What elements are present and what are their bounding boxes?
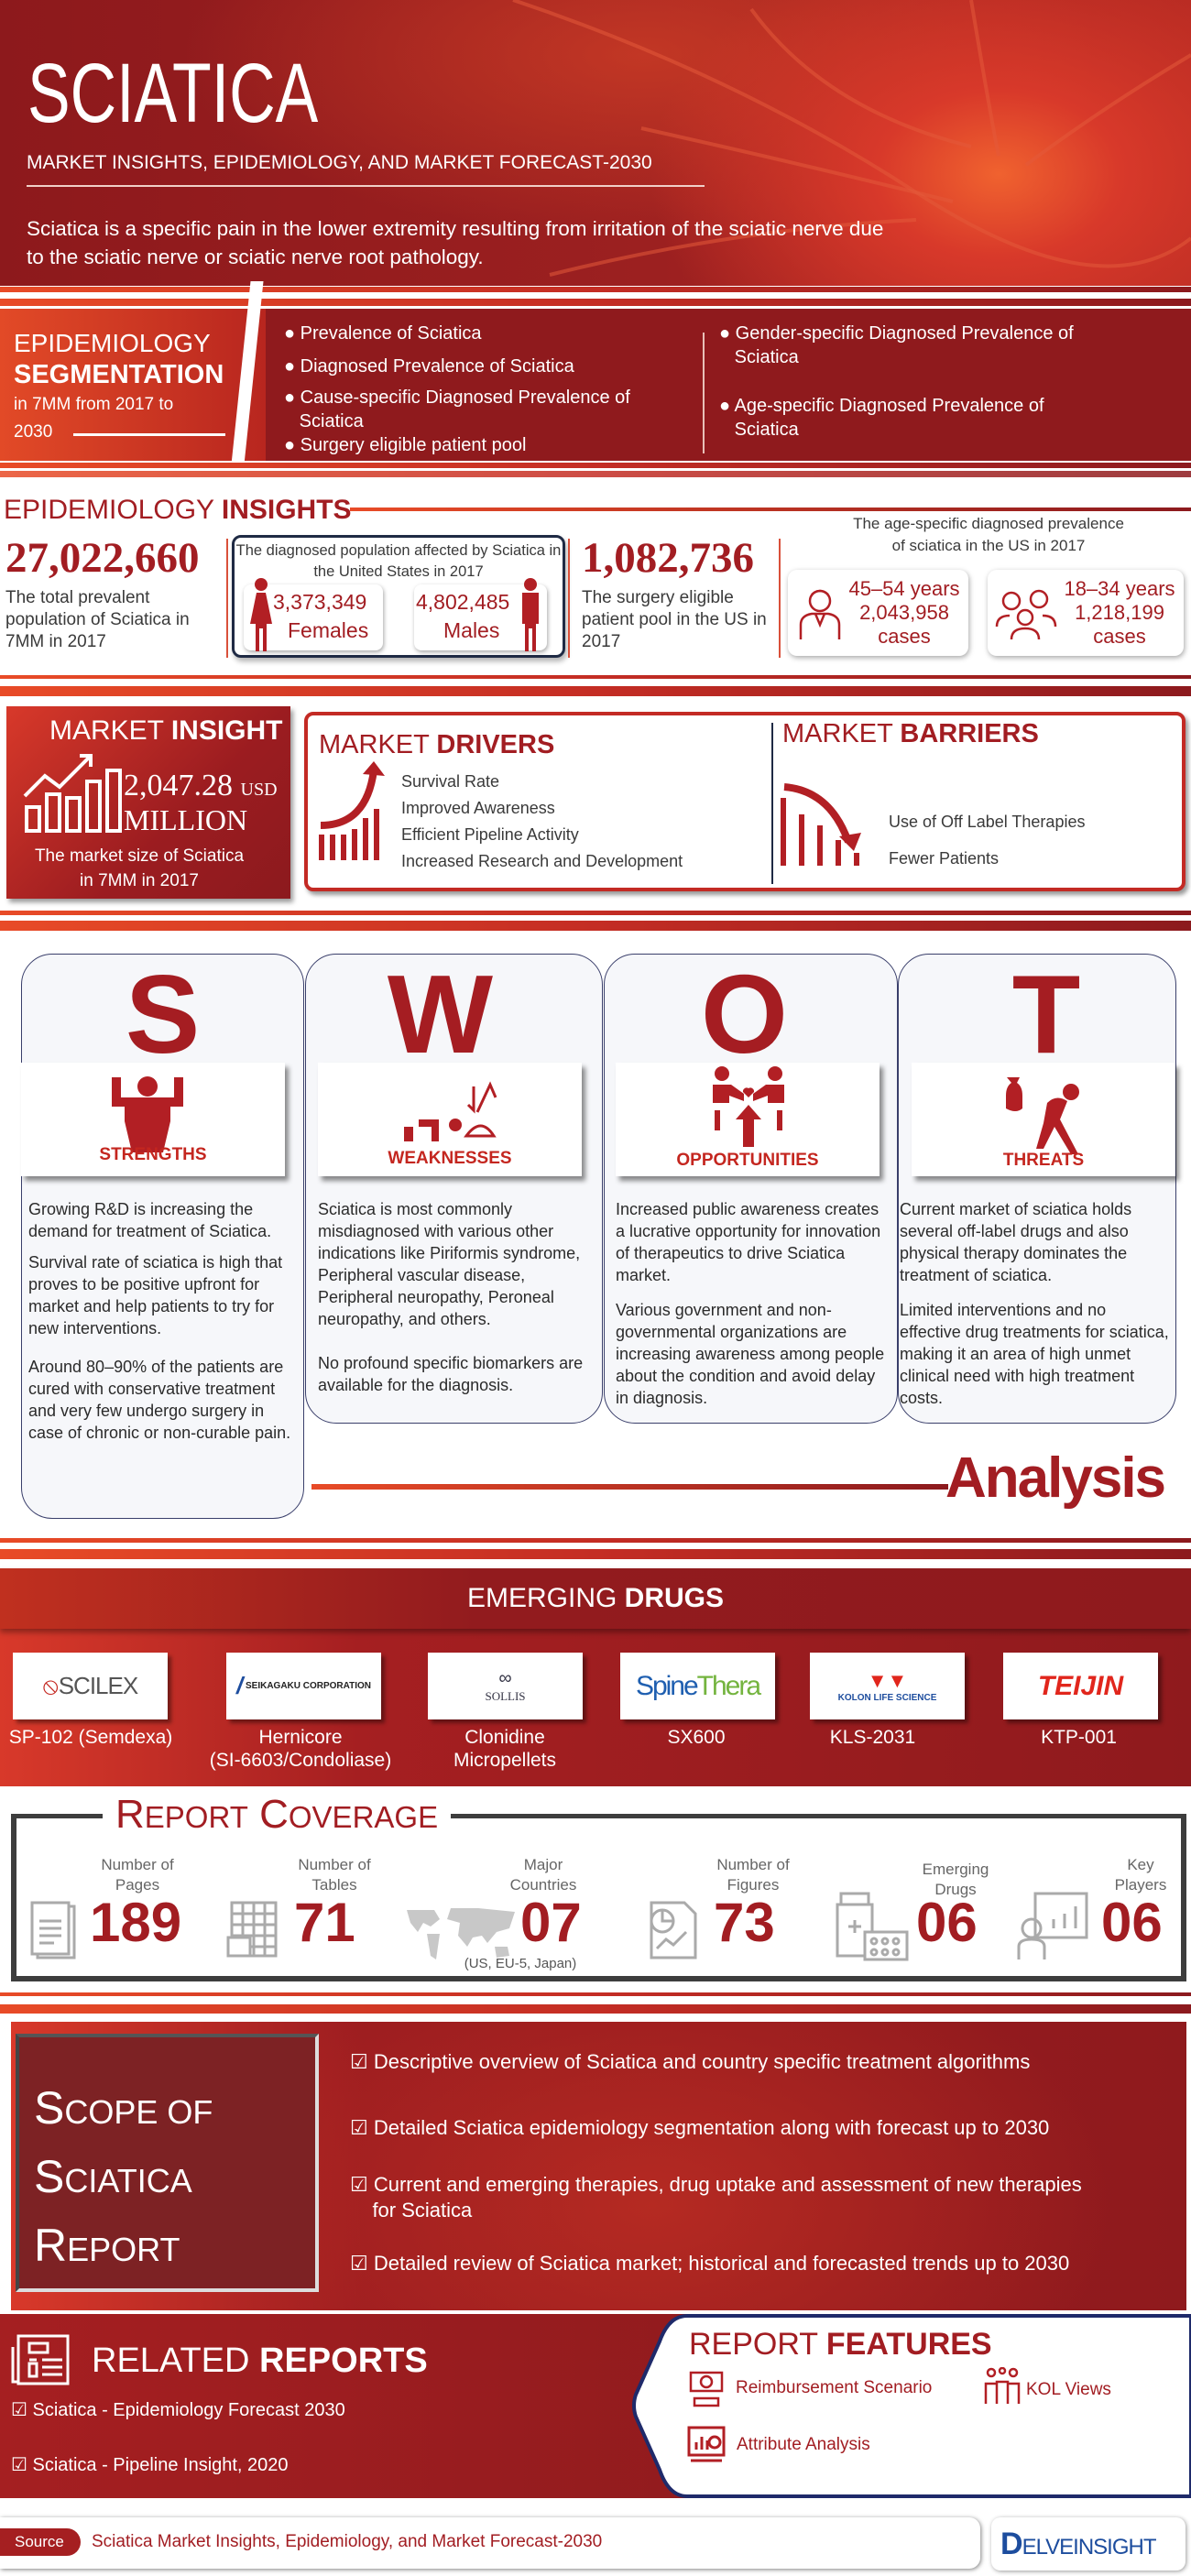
coverage: tables: Tables — [311, 1876, 357, 1894]
logo: kolon — [810, 1653, 965, 1719]
logo: kolon: ▼▼ — [868, 1669, 907, 1692]
text: threats: Limited interventions and no effective drug treatments for sciatica, making it an area of high unmet clinical need with high treatment costs. — [900, 1301, 1169, 1407]
card: 18-34: cases — [1093, 625, 1146, 648]
panel: epidemiology segmentation: ● Diagnosed Prevalence of Sciatica — [284, 356, 574, 377]
scope items: for Sciatica — [372, 2199, 472, 2221]
stripes — [0, 675, 1191, 679]
panel: epidemiology segmentation: ● Surgery eligible patient pool — [284, 435, 526, 455]
panel: epidemiology segmentation: Sciatica — [735, 420, 799, 440]
panel: SWOT threats — [898, 954, 1176, 1424]
logo: spinethera: Thera — [697, 1671, 759, 1700]
coverage: countries: (US, EU-5, Japan) — [464, 1956, 576, 1971]
coverage: emerging drugs — [836, 1861, 989, 1960]
source bar: Source — [15, 2533, 64, 2550]
scope items: ☑ Current and emerging therapies, drug uptake and assessment of new therapies — [350, 2173, 1082, 2196]
panel: drivers and barriers: MARKET DRIVERS — [319, 730, 554, 759]
box: scope title: SCOPE OF — [34, 2082, 213, 2134]
letter T: T — [1012, 952, 1080, 1076]
scope items: ☑ Detailed Sciatica epidemiology segmentation along with forecast up to 2030 — [350, 2116, 1049, 2139]
card: 18-34 — [988, 570, 1184, 656]
panel: report features — [632, 2314, 1191, 2498]
icon: rising bars — [319, 761, 385, 860]
card: weaknesses — [318, 1063, 582, 1176]
stat: total prevalent: The total prevalent population of Sciatica in 7MM in 2017 — [5, 588, 190, 651]
coverage: figures: Number of — [716, 1856, 790, 1873]
panel: market insight: 2,047.28 USD — [124, 769, 278, 802]
panel: market insight — [6, 706, 290, 899]
text: Micropellets — [453, 1750, 556, 1771]
hero background — [0, 0, 1191, 286]
logo: sollis — [428, 1653, 583, 1719]
heading: analysis — [311, 1446, 1164, 1510]
coverage: key players: 06 — [1101, 1892, 1163, 1953]
text: Hernicore — [258, 1727, 343, 1748]
stat: surgery eligible — [582, 534, 767, 651]
coverage: pages: Pages — [115, 1876, 159, 1894]
logo: spinethera — [620, 1653, 775, 1719]
card: strengths — [21, 1063, 285, 1176]
icon: growth chart — [24, 754, 122, 833]
text: strengths: Survival rate of sciatica is high that proves to be positive upfront for market and help patients to try for new interventions. — [28, 1253, 282, 1337]
panel: drivers and barriers: Improved Awareness — [401, 799, 555, 817]
text: opportunities: Various government and non-governmental organizations are increasing awareness among people about the condition and avoid delay in diagnosis. — [616, 1301, 884, 1407]
card: threats: THREATS — [1003, 1151, 1084, 1170]
logo: seikagaku: / — [236, 1672, 243, 1699]
text: strengths: Around 80–90% of the patients are cured with conservative treatment and very few undergo surgery in case of chronic or non-curable pain. — [28, 1358, 290, 1442]
text: SX600 — [667, 1727, 726, 1748]
card: males: 4,802,485 — [416, 590, 509, 614]
source bar: Sciatica Market Insights, Epidemiology, and Market Forecast-2030 — [92, 2532, 602, 2551]
text: strengths — [28, 1200, 290, 1442]
coverage: pages: Number of — [101, 1856, 174, 1873]
logo: teijin: TEIJIN — [1038, 1671, 1123, 1700]
panel: epidemiology segmentation: ● Prevalence of Sciatica — [284, 323, 482, 344]
card: 45-54: 2,043,958 — [859, 601, 949, 624]
card: females: Females — [288, 618, 368, 642]
icon: document — [11, 2334, 70, 2385]
coverage: countries: Major — [524, 1856, 563, 1873]
logo: delveinsight: DELVEINSIGHT — [1000, 2527, 1156, 2561]
panel: scope of report — [11, 2022, 1186, 2310]
text: opportunities — [616, 1200, 884, 1407]
panel: related reports: ☑ Sciatica - Pipeline Insight, 2020 — [11, 2455, 289, 2475]
logo: teijin — [1003, 1653, 1158, 1719]
letter S: S — [126, 952, 200, 1076]
panel: epidemiology segmentation: ● Age-specific Diagnosed Prevalence of — [719, 396, 1044, 416]
logo: spinethera: Spine — [636, 1671, 697, 1700]
logo: scilex: ⦸ — [43, 1671, 59, 1698]
panel: SWOT opportunities — [604, 954, 898, 1424]
panel: gender diagnosed population: The diagnosed population affected by Sciatica in the United States in 2017 — [236, 542, 561, 580]
logo: delveinsight — [991, 2517, 1186, 2571]
source bar — [0, 2517, 980, 2569]
icon: attribute analysis — [687, 2426, 726, 2462]
card: opportunities — [616, 1063, 880, 1176]
coverage: countries: Countries — [510, 1876, 576, 1894]
text: threats — [900, 1200, 1169, 1407]
card: weaknesses: WEAKNESSES — [388, 1149, 512, 1168]
box: scope title: SCIATICA — [34, 2151, 192, 2202]
stat: total prevalent — [5, 534, 200, 651]
stripes — [0, 911, 1191, 915]
card: males: Males — [443, 618, 499, 642]
text: weaknesses: No profound specific biomarkers are available for the diagnosis. — [318, 1354, 583, 1394]
panel: age-specific: The age-specific diagnosed prevalence — [853, 515, 1124, 532]
coverage: key players — [1017, 1856, 1166, 1959]
coverage: tables: 71 — [294, 1892, 355, 1953]
panel: drivers and barriers — [304, 712, 1186, 891]
logo: seikagaku: SEIKAGAKU CORPORATION — [246, 1681, 371, 1691]
panel: SWOT weaknesses — [305, 954, 603, 1424]
box: scope title — [16, 2034, 319, 2292]
panel: epidemiology segmentation: 2030 — [14, 422, 52, 442]
panel: report coverage — [11, 1814, 1186, 1981]
coverage: countries: 07 — [520, 1892, 582, 1953]
panel: SWOT strengths — [21, 954, 304, 1519]
panel: related reports: RELATED REPORTS — [92, 2341, 428, 2380]
heading: EMERGING DRUGS — [467, 1583, 724, 1613]
scope items: ☑ Descriptive overview of Sciatica and country specific treatment algorithms — [350, 2050, 1030, 2073]
panel: epidemiology segmentation — [0, 309, 1191, 461]
panel: epidemiology segmentation: ● Cause-specific Diagnosed Prevalence of — [284, 387, 630, 408]
logo: sollis: SOLLIS — [485, 1689, 526, 1703]
stripes — [0, 1538, 1191, 1543]
panel: market insight: MARKET INSIGHT — [49, 715, 282, 746]
heading: analysis: Analysis — [945, 1446, 1164, 1510]
card: strengths: STRENGTHS — [99, 1145, 207, 1164]
logo: scilex: SCILEX — [59, 1672, 137, 1699]
icon: reimbursement — [689, 2371, 724, 2407]
logo: seikagaku — [226, 1653, 381, 1719]
card: 18-34: 18–34 years — [1064, 577, 1175, 600]
stripes — [0, 1992, 1191, 1996]
heading: epidemiology insights: EPIDEMIOLOGY INSIGHTS — [4, 495, 352, 525]
card: threats — [912, 1063, 1175, 1176]
panel: related reports — [0, 2314, 696, 2498]
panel: market insight: MILLION — [124, 803, 247, 836]
icon: falling bars — [781, 783, 861, 866]
panel: report features: REPORT FEATURES — [689, 2327, 992, 2362]
coverage: figures — [650, 1856, 790, 1959]
coverage: tables — [227, 1856, 371, 1957]
subtitle: MARKET INSIGHTS, EPIDEMIOLOGY, AND MARKET FORECAST-2030 — [27, 152, 652, 173]
panel: report features: Attribute Analysis — [737, 2435, 870, 2454]
coverage: figures: 73 — [714, 1892, 775, 1953]
letter W: W — [388, 952, 493, 1076]
panel: emerging drugs — [0, 1568, 1191, 1786]
coverage: emerging drugs: 06 — [916, 1892, 978, 1953]
panel: epidemiology segmentation: in 7MM from 2017 to — [14, 395, 173, 414]
panel: drivers and barriers: Efficient Pipeline Activity — [401, 825, 579, 844]
letter O: O — [701, 952, 788, 1076]
text: (SI-6603/Condoliase) — [210, 1750, 391, 1771]
coverage: pages: 189 — [90, 1892, 181, 1953]
heading: report coverage: REPORT COVERAGE — [115, 1792, 438, 1837]
card: 18-34: 1,218,199 — [1075, 601, 1164, 624]
card: 45-54 — [788, 570, 968, 656]
panel: drivers and barriers: Use of Off Label Therapies — [889, 813, 1085, 831]
stat: surgery eligible: 1,082,736 — [582, 534, 754, 582]
coverage: emerging drugs: Drugs — [934, 1881, 977, 1898]
box: scope title: REPORT — [34, 2220, 180, 2271]
panel: drivers and barriers: MARKET BARRIERS — [782, 719, 1039, 748]
card: females — [244, 584, 383, 650]
panel: epidemiology segmentation: SEGMENTATION — [14, 360, 224, 389]
text: Clonidine — [464, 1727, 545, 1748]
panel: related reports: ☑ Sciatica - Epidemiology Forecast 2030 — [11, 2400, 345, 2420]
scope items — [350, 2050, 1082, 2275]
logo: kolon: KOLON LIFE SCIENCE — [838, 1693, 936, 1703]
stripes — [0, 287, 1191, 292]
panel: epidemiology segmentation: EPIDEMIOLOGY — [14, 329, 211, 357]
subtitle — [27, 152, 705, 187]
coverage: tables: Number of — [298, 1856, 371, 1873]
text: weaknesses: Sciatica is most commonly misdiagnosed with various other indications like Piriformis syndrome, Peripheral vascular disease, Peripheral neuropathy, Peroneal neuropathy, and others. — [318, 1200, 580, 1328]
title: SCIATICA — [27, 47, 318, 140]
card: 45-54: cases — [878, 625, 931, 648]
coverage: key players: Key — [1127, 1856, 1154, 1873]
coverage: pages — [31, 1856, 181, 1959]
panel: market insight: in 7MM in 2017 — [80, 871, 199, 890]
logo: sollis: ∞ — [498, 1668, 512, 1688]
panel: epidemiology segmentation: Sciatica — [300, 411, 364, 431]
coverage: countries — [407, 1856, 582, 1971]
card: females: 3,373,349 — [273, 590, 366, 614]
logo: scilex — [13, 1653, 168, 1719]
text: opportunities: Increased public awareness creates a lucrative opportunity for innovation of therapeutics to drive Sciatica market. — [616, 1200, 880, 1284]
icon: KOL — [984, 2367, 1021, 2404]
drug names: SP-102 (Semdexa) — [9, 1727, 172, 1748]
panel: drivers and barriers: Fewer Patients — [889, 849, 999, 868]
description: Sciatica is a specific pain in the lower extremity resulting from irritation of the sciatic nerve due to the sciatic nerve or sciatic nerve root pathology. — [27, 217, 883, 268]
text: strengths: Growing R&D is increasing the demand for treatment of Sciatica. — [28, 1200, 271, 1240]
coverage: figures: Figures — [727, 1876, 779, 1894]
panel: report features: KOL Views — [1026, 2380, 1111, 2399]
coverage: emerging drugs: Emerging — [923, 1861, 989, 1878]
panel: report features: Reimbursement Scenario — [736, 2378, 932, 2397]
panel: gender diagnosed population — [232, 535, 565, 658]
panel: epidemiology segmentation: Sciatica — [735, 347, 799, 367]
text: weaknesses — [318, 1200, 583, 1394]
coverage: key players: Players — [1115, 1876, 1166, 1894]
scope items: ☑ Detailed review of Sciatica market; historical and forecasted trends up to 2030 — [350, 2252, 1069, 2275]
panel: drivers and barriers: Survival Rate — [401, 772, 499, 791]
panel: age-specific — [786, 515, 1187, 661]
panel: age-specific: of sciatica in the US in 2017 — [892, 537, 1085, 554]
card: opportunities: OPPORTUNITIES — [676, 1151, 819, 1170]
stat: surgery eligible: The surgery eligible patient pool in the US in 2017 — [582, 588, 767, 651]
card: males — [414, 584, 547, 650]
text: threats: Current market of sciatica holds several off-label drugs and also physical therapy dominates the treatment of sciatica. — [900, 1200, 1131, 1284]
panel: market insight: The market size of Sciatica — [35, 846, 244, 866]
stat: total prevalent: 27,022,660 — [5, 534, 200, 582]
panel: epidemiology segmentation: ● Gender-specific Diagnosed Prevalence of — [719, 323, 1074, 344]
panel: drivers and barriers: Increased Research and Development — [401, 852, 683, 870]
text: KTP-001 — [1041, 1727, 1117, 1748]
text: KLS-2031 — [830, 1727, 915, 1748]
card: 45-54: 45–54 years — [848, 577, 960, 600]
